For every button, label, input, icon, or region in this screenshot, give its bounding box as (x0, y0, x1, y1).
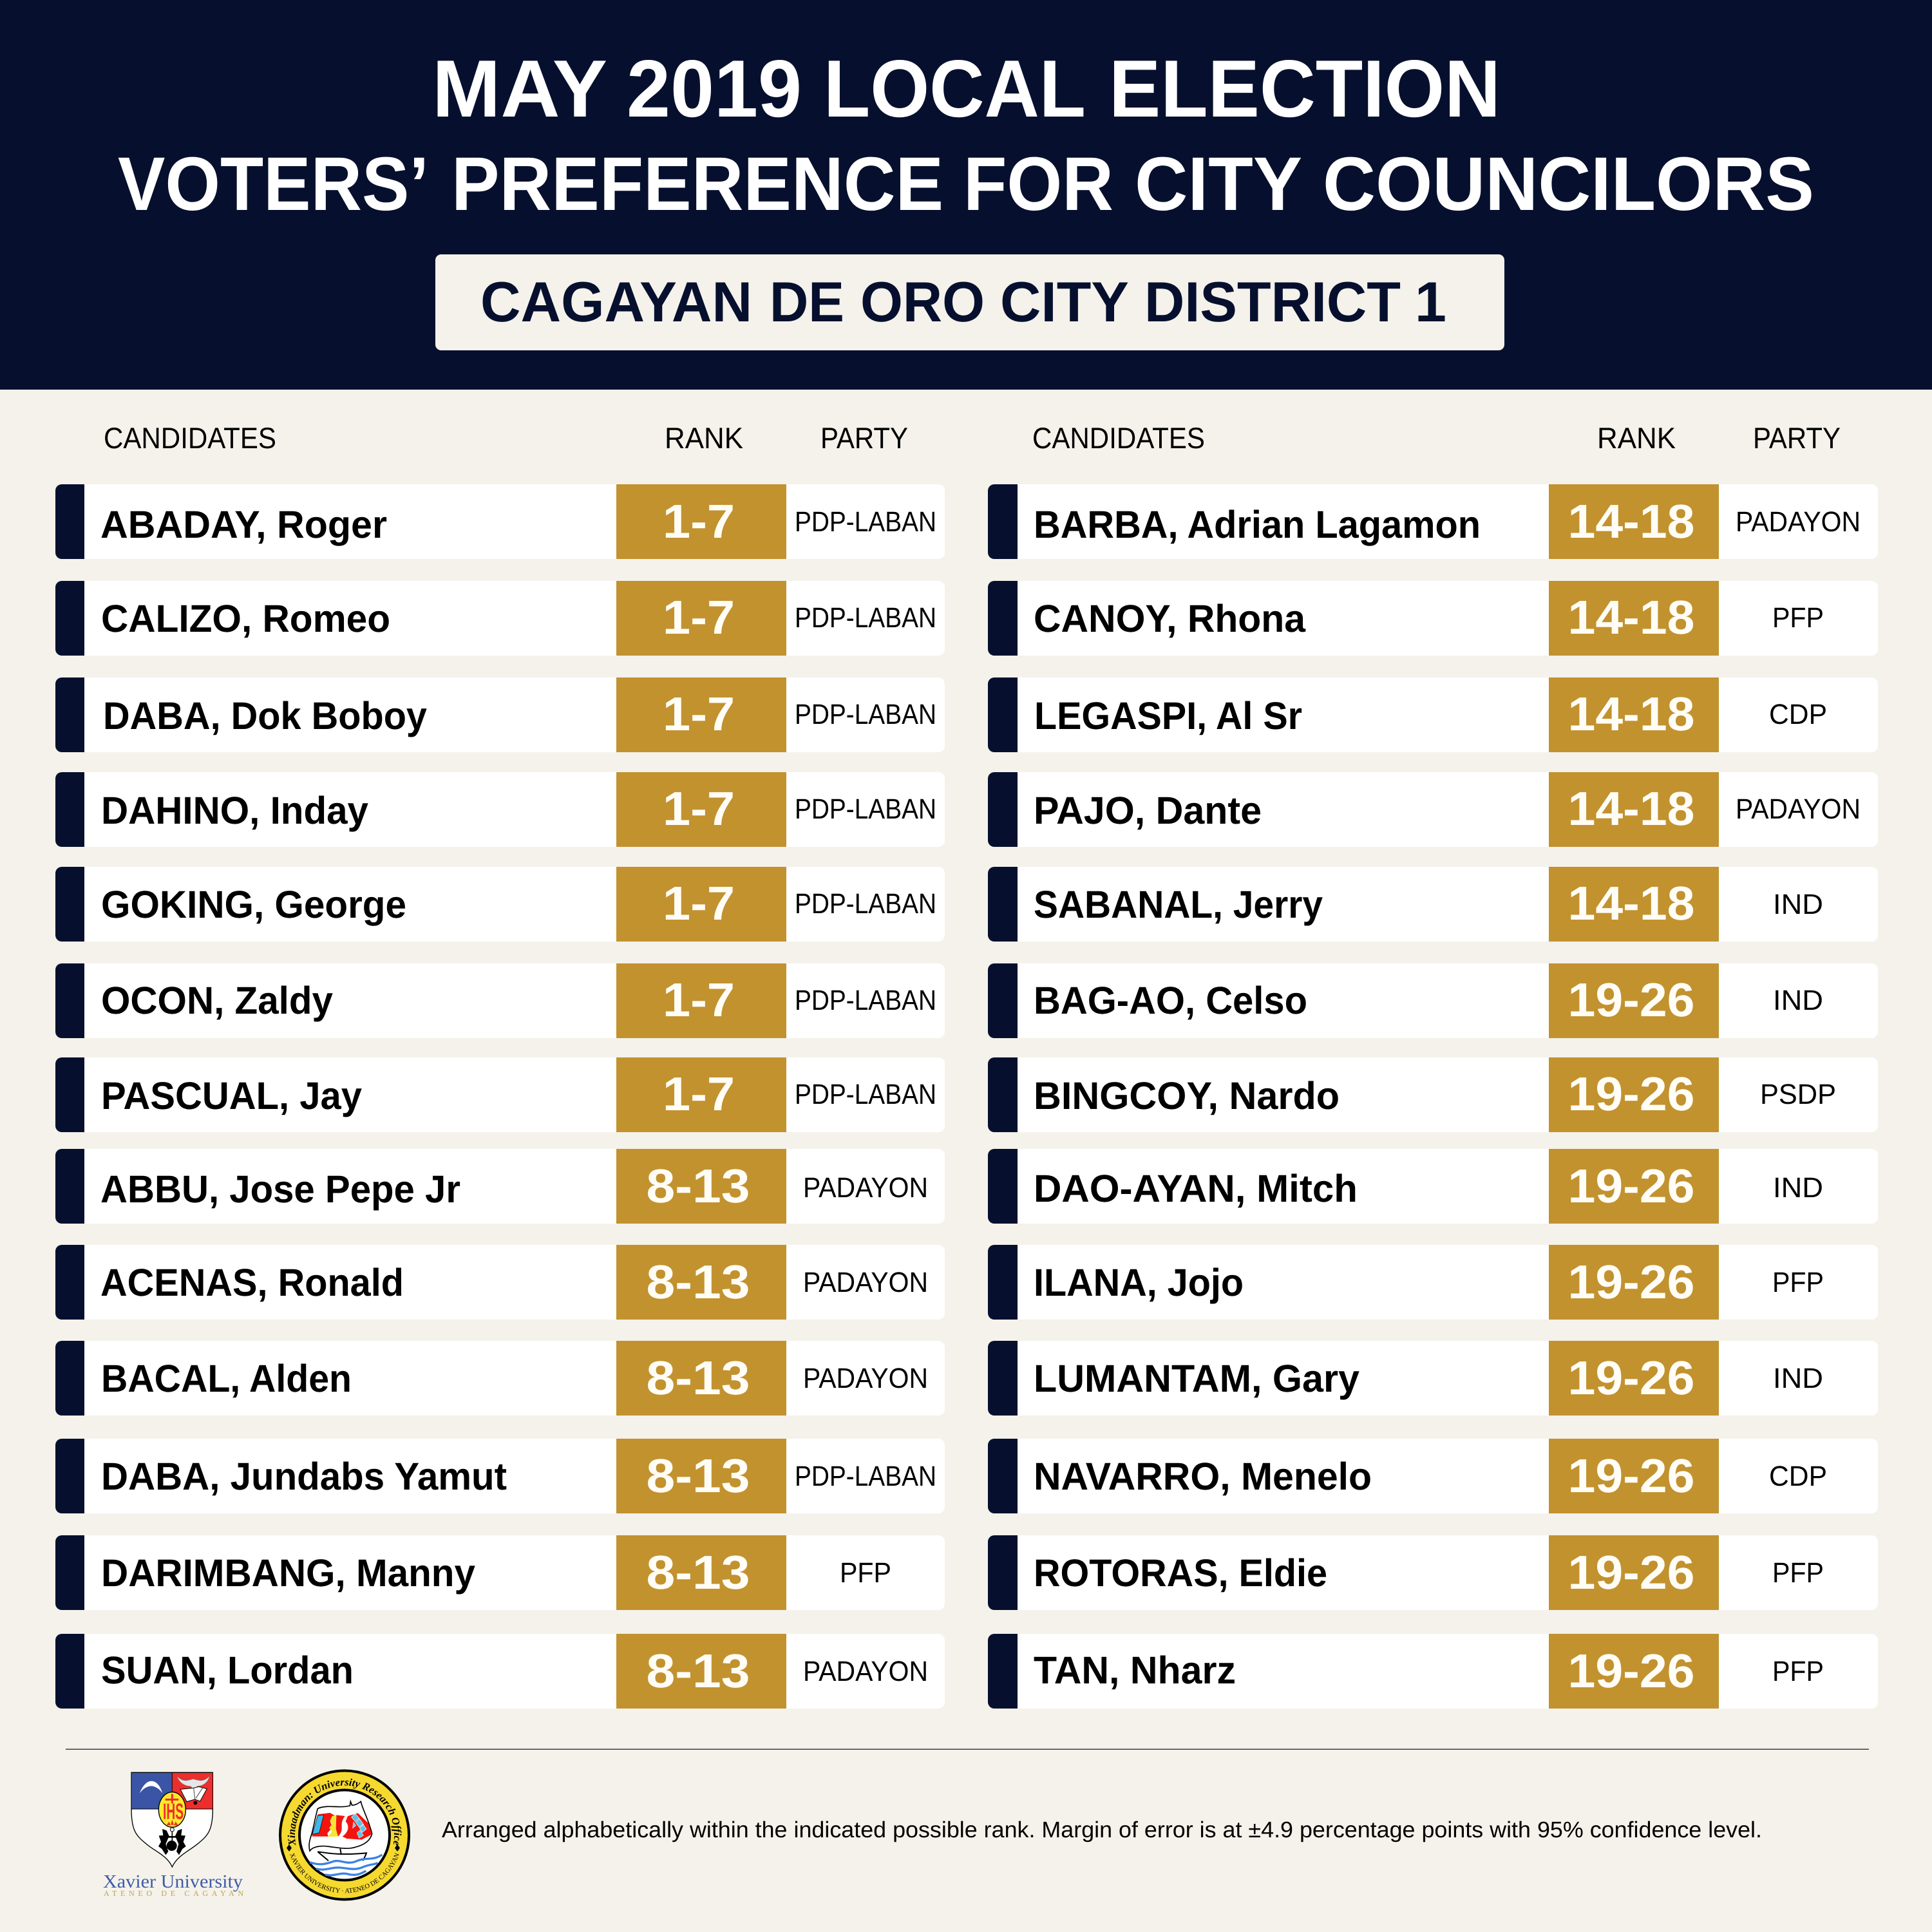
row: SABANAL, Jerry: SABANAL, Jerry (1034, 883, 1323, 926)
row: CALIZO, Romeo (55, 581, 945, 656)
row: DARIMBANG, Manny: DARIMBANG, Manny (101, 1551, 476, 1595)
row: BAG-AO, Celso: BAG-AO, Celso (1034, 979, 1307, 1022)
icon: ship (309, 1801, 382, 1875)
row: ILANA, Jojo: 19-26 (1567, 1255, 1695, 1309)
row: BARBA, Adrian Lagamon (988, 484, 1878, 559)
row: OCON, Zaldy: PDP-LABAN (795, 985, 936, 1016)
crest wordmark: Xavier University (103, 1871, 243, 1892)
subtitle box: 1 (1415, 270, 1446, 334)
row: CALIZO, Romeo: 1-7 (663, 591, 735, 644)
row: NAVARRO, Menelo: NAVARRO, Menelo (1034, 1455, 1372, 1498)
row: ROTORAS, Eldie: PFP (1772, 1557, 1824, 1589)
title line 1: LOCAL (824, 43, 1086, 134)
logo: University Research Office seal (279, 1770, 410, 1901)
row: DARIMBANG, Manny (55, 1535, 945, 1610)
title line 2: VOTERS’ (118, 142, 429, 227)
row: CANOY, Rhona (988, 581, 1878, 656)
row: DABA, Jundabs Yamut: PDP-LABAN (795, 1461, 936, 1492)
column headers: left table: RANK (665, 421, 743, 455)
seal diamonds (287, 1844, 400, 1852)
row: DABA, Dok Boboy: 1-7 (663, 687, 735, 741)
row: SABANAL, Jerry: IND (1773, 889, 1823, 920)
row: ACENAS, Ronald: 8-13 (647, 1255, 750, 1309)
row: CANOY, Rhona: PFP (1772, 602, 1824, 634)
row: BINGCOY, Nardo: 19-26 (1567, 1067, 1695, 1121)
title line 1: ELECTION (1109, 43, 1501, 134)
row: ABBU, Jose Pepe Jr (55, 1149, 945, 1224)
column headers: left table (104, 421, 908, 455)
row: CANOY, Rhona: CANOY, Rhona (1034, 597, 1306, 640)
title line 2 (118, 142, 1814, 227)
row: GOKING, George (55, 867, 945, 942)
row: DARIMBANG, Manny: 8-13 (647, 1546, 750, 1599)
row: ILANA, Jojo: PFP (1772, 1267, 1824, 1298)
row: TAN, Nharz: PFP (1772, 1656, 1824, 1687)
row: DAO-AYAN, Mitch: DAO-AYAN, Mitch (1034, 1167, 1358, 1210)
subtitle box: CAGAYAN (480, 270, 752, 334)
row: TAN, Nharz (988, 1634, 1878, 1709)
row: CANOY, Rhona: 14-18 (1567, 591, 1695, 644)
row: PASCUAL, Jay (55, 1057, 945, 1132)
row: TAN, Nharz: TAN, Nharz (1034, 1649, 1236, 1692)
row: PAJO, Dante: PAJO, Dante (1034, 789, 1262, 832)
row: ABADAY, Roger: PDP-LABAN (795, 506, 936, 538)
row: ABADAY, Roger (55, 484, 945, 559)
row: LUMANTAM, Gary: IND (1773, 1363, 1823, 1394)
column headers: right table: PARTY (1753, 421, 1841, 455)
row: SUAN, Lordan (55, 1634, 945, 1709)
row: NAVARRO, Menelo: CDP (1769, 1461, 1827, 1492)
row: BACAL, Alden: BACAL, Alden (101, 1357, 352, 1400)
row: PAJO, Dante (988, 772, 1878, 847)
row: BACAL, Alden: 8-13 (647, 1351, 750, 1405)
logo: Xavier University crest (103, 1772, 243, 1898)
row: DAO-AYAN, Mitch: 19-26 (1567, 1159, 1695, 1213)
row: BARBA, Adrian Lagamon: PADAYON (1736, 506, 1861, 538)
subtitle box: ORO (860, 270, 985, 334)
column headers: left table: PARTY (820, 421, 908, 455)
row: DABA, Jundabs Yamut: DABA, Jundabs Yamut (101, 1455, 507, 1498)
icon: shield: IHS (163, 1799, 184, 1824)
row: ROTORAS, Eldie: ROTORAS, Eldie (1034, 1551, 1327, 1595)
row: CALIZO, Romeo: CALIZO, Romeo (101, 597, 390, 640)
row: DAHINO, Inday: DAHINO, Inday (101, 789, 369, 832)
row: SABANAL, Jerry (988, 867, 1878, 942)
row: LEGASPI, Al Sr: 14-18 (1567, 687, 1695, 741)
row: LUMANTAM, Gary: LUMANTAM, Gary (1034, 1357, 1360, 1400)
row: NAVARRO, Menelo: 19-26 (1567, 1449, 1695, 1502)
row: ABBU, Jose Pepe Jr: ABBU, Jose Pepe Jr (100, 1168, 460, 1211)
row: LEGASPI, Al Sr: LEGASPI, Al Sr (1034, 694, 1302, 737)
row: OCON, Zaldy (55, 963, 945, 1038)
row: DABA, Dok Boboy: PDP-LABAN (795, 699, 936, 730)
column headers: right table: RANK (1597, 421, 1676, 455)
row: PASCUAL, Jay: 1-7 (663, 1067, 735, 1121)
row: BINGCOY, Nardo: BINGCOY, Nardo (1034, 1074, 1340, 1117)
title line 2: CITY (1135, 142, 1302, 227)
row: LEGASPI, Al Sr: CDP (1769, 699, 1827, 730)
row: PAJO, Dante: 14-18 (1567, 782, 1695, 835)
seal bottom text: XAVIER UNIVERSITY · ATENEO DE CAGAYAN (290, 1852, 399, 1893)
title line 2: PREFERENCE (451, 142, 943, 227)
crest tagline: ATENEO DE CAGAYAN (104, 1889, 243, 1898)
row: LUMANTAM, Gary: 19-26 (1567, 1351, 1695, 1405)
title line 1: MAY (432, 43, 607, 134)
row: ABADAY, Roger: ABADAY, Roger (100, 503, 387, 546)
row: LEGASPI, Al Sr (988, 677, 1878, 752)
row: DAHINO, Inday: 1-7 (663, 782, 735, 835)
subtitle box: DISTRICT (1144, 270, 1401, 334)
row: ABBU, Jose Pepe Jr: PADAYON (803, 1172, 928, 1204)
row: SUAN, Lordan: PADAYON (803, 1656, 928, 1687)
row: LUMANTAM, Gary (988, 1341, 1878, 1416)
row: GOKING, George: 1-7 (663, 876, 735, 930)
row: BINGCOY, Nardo (988, 1057, 1878, 1132)
footnote: Arranged alphabetically within the indicated possible rank. Margin of error is at ±4.9 percentage points with 95% confidence level. (442, 1817, 1762, 1842)
column headers: right table: CANDIDATES (1032, 421, 1205, 455)
row: OCON, Zaldy: OCON, Zaldy (101, 979, 334, 1022)
subtitle box: CITY (1000, 270, 1129, 334)
row: ILANA, Jojo (988, 1245, 1878, 1320)
row: ABBU, Jose Pepe Jr: 8-13 (647, 1159, 750, 1213)
seal top text: Xinaadman: University Research Office (287, 1779, 402, 1846)
row: PAJO, Dante: PADAYON (1736, 793, 1861, 825)
row: OCON, Zaldy: 1-7 (663, 973, 735, 1027)
subtitle box: DE (770, 270, 844, 334)
right table (988, 484, 1878, 1709)
row: DABA, Dok Boboy (55, 677, 945, 752)
row: DAHINO, Inday: PDP-LABAN (795, 793, 936, 825)
row: ACENAS, Ronald: ACENAS, Ronald (100, 1261, 404, 1304)
row: ROTORAS, Eldie: 19-26 (1567, 1546, 1695, 1599)
row: PASCUAL, Jay: PASCUAL, Jay (101, 1074, 363, 1117)
title line 1: 2019 (627, 43, 802, 134)
row: BACAL, Alden (55, 1341, 945, 1416)
row: ROTORAS, Eldie (988, 1535, 1878, 1610)
row: BARBA, Adrian Lagamon: 14-18 (1567, 495, 1695, 548)
row: BAG-AO, Celso: IND (1773, 985, 1823, 1016)
row: DAHINO, Inday (55, 772, 945, 847)
icon: shield (131, 1772, 213, 1867)
title line 2: FOR (963, 142, 1113, 227)
row: DAO-AYAN, Mitch: IND (1773, 1172, 1823, 1204)
row: BINGCOY, Nardo: PSDP (1760, 1079, 1836, 1110)
row: BACAL, Alden: PADAYON (803, 1363, 928, 1394)
row: GOKING, George: GOKING, George (101, 883, 406, 926)
row: BARBA, Adrian Lagamon: BARBA, Adrian Lagamon (1034, 503, 1481, 546)
row: DARIMBANG, Manny: PFP (840, 1557, 891, 1589)
title line 2: COUNCILORS (1323, 142, 1814, 227)
row: PASCUAL, Jay: PDP-LABAN (795, 1079, 936, 1110)
subtitle box (435, 254, 1504, 350)
row: ILANA, Jojo: ILANA, Jojo (1034, 1261, 1244, 1304)
row: GOKING, George: PDP-LABAN (795, 888, 936, 920)
header banner (0, 0, 1932, 390)
row: DABA, Jundabs Yamut: 8-13 (647, 1449, 750, 1502)
column headers: right table (1032, 421, 1841, 455)
title line 1 (432, 43, 1501, 134)
row: SABANAL, Jerry: 14-18 (1567, 876, 1695, 930)
row: NAVARRO, Menelo (988, 1439, 1878, 1513)
row: CALIZO, Romeo: PDP-LABAN (795, 602, 936, 634)
row: ACENAS, Ronald (55, 1245, 945, 1320)
row: SUAN, Lordan: SUAN, Lordan (101, 1649, 354, 1692)
row: BAG-AO, Celso (988, 963, 1878, 1038)
row: ABADAY, Roger: 1-7 (663, 495, 735, 548)
left table (55, 484, 945, 1709)
row: BAG-AO, Celso: 19-26 (1567, 973, 1695, 1027)
row: DABA, Jundabs Yamut (55, 1439, 945, 1513)
column headers: left table: CANDIDATES (104, 421, 276, 455)
row: DAO-AYAN, Mitch (988, 1149, 1878, 1224)
row: ACENAS, Ronald: PADAYON (803, 1267, 928, 1298)
row: TAN, Nharz: 19-26 (1567, 1644, 1695, 1698)
row: SUAN, Lordan: 8-13 (647, 1644, 750, 1698)
row: DABA, Dok Boboy: DABA, Dok Boboy (103, 694, 428, 737)
